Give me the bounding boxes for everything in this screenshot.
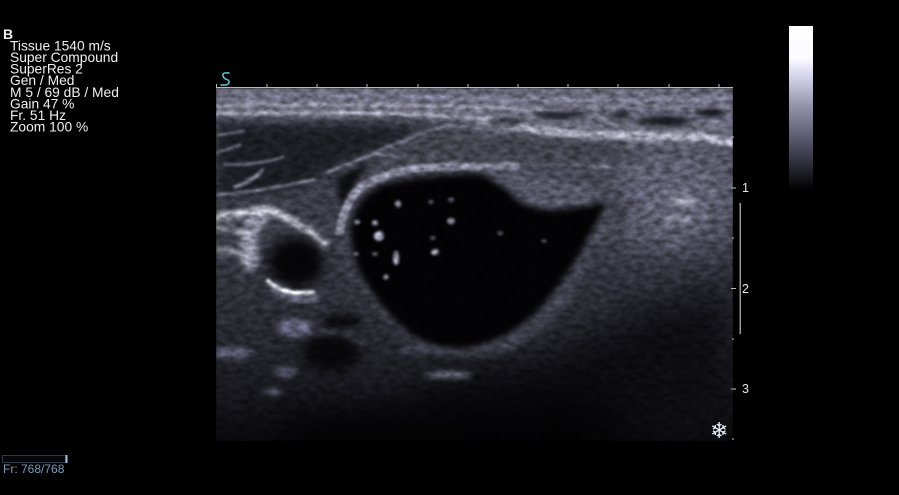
depth scale <box>731 137 749 439</box>
settings text block: Tissue 1540 m/s <box>10 38 111 54</box>
right bright tissue <box>610 150 733 250</box>
depth scale: 3 <box>742 382 749 396</box>
bottom shadow <box>291 396 615 441</box>
grayscale bar <box>789 26 813 190</box>
small dark vessels <box>323 313 361 329</box>
strap muscle band <box>404 128 635 163</box>
left fascia lines <box>216 131 315 195</box>
settings text block: Fr. 51 Hz <box>10 108 66 123</box>
settings text block: Gen / Med <box>10 73 74 88</box>
settings text block: Gain 47 % <box>10 96 74 112</box>
depth scale: 1 <box>742 181 749 195</box>
settings text block: Zoom 100 % <box>10 120 88 134</box>
settings text block: M 5 / 69 dB / Med <box>10 85 119 100</box>
cyst lumen <box>350 174 608 348</box>
top layer glow <box>216 88 733 118</box>
bright capsule arc <box>339 166 520 235</box>
right deep shadow <box>440 272 733 410</box>
lower left echoes <box>210 319 472 395</box>
settings text block: Super Compound <box>10 50 118 65</box>
depth scale: 2 <box>742 282 749 296</box>
echogenic upper right region <box>480 170 612 250</box>
transducer orientation mark <box>221 73 229 85</box>
cine frame counter <box>2 455 68 476</box>
carotid bright wall <box>216 210 326 262</box>
cine frame counter: Fr: 768/768 <box>3 462 65 476</box>
bright spots right <box>622 190 697 246</box>
ultrasound image <box>210 88 733 470</box>
focus bar <box>740 203 741 334</box>
tissue base <box>216 88 733 441</box>
top stripes <box>216 96 733 172</box>
bright specks in cyst <box>353 198 547 280</box>
muscle layer dark band <box>216 122 440 200</box>
freeze icon: ❄ <box>710 419 728 444</box>
carotid lower echo <box>270 284 318 299</box>
mid left tissue <box>325 188 334 196</box>
dark wedge outside capsule <box>336 160 372 210</box>
settings text block <box>3 26 119 134</box>
thyroid capsule wall <box>337 162 632 356</box>
top depth ruler <box>216 84 733 88</box>
dark pockets in top layers <box>485 109 725 126</box>
carotid lumen <box>268 237 324 287</box>
mode label: B <box>3 26 13 42</box>
settings text block: SuperRes 2 <box>10 62 83 76</box>
